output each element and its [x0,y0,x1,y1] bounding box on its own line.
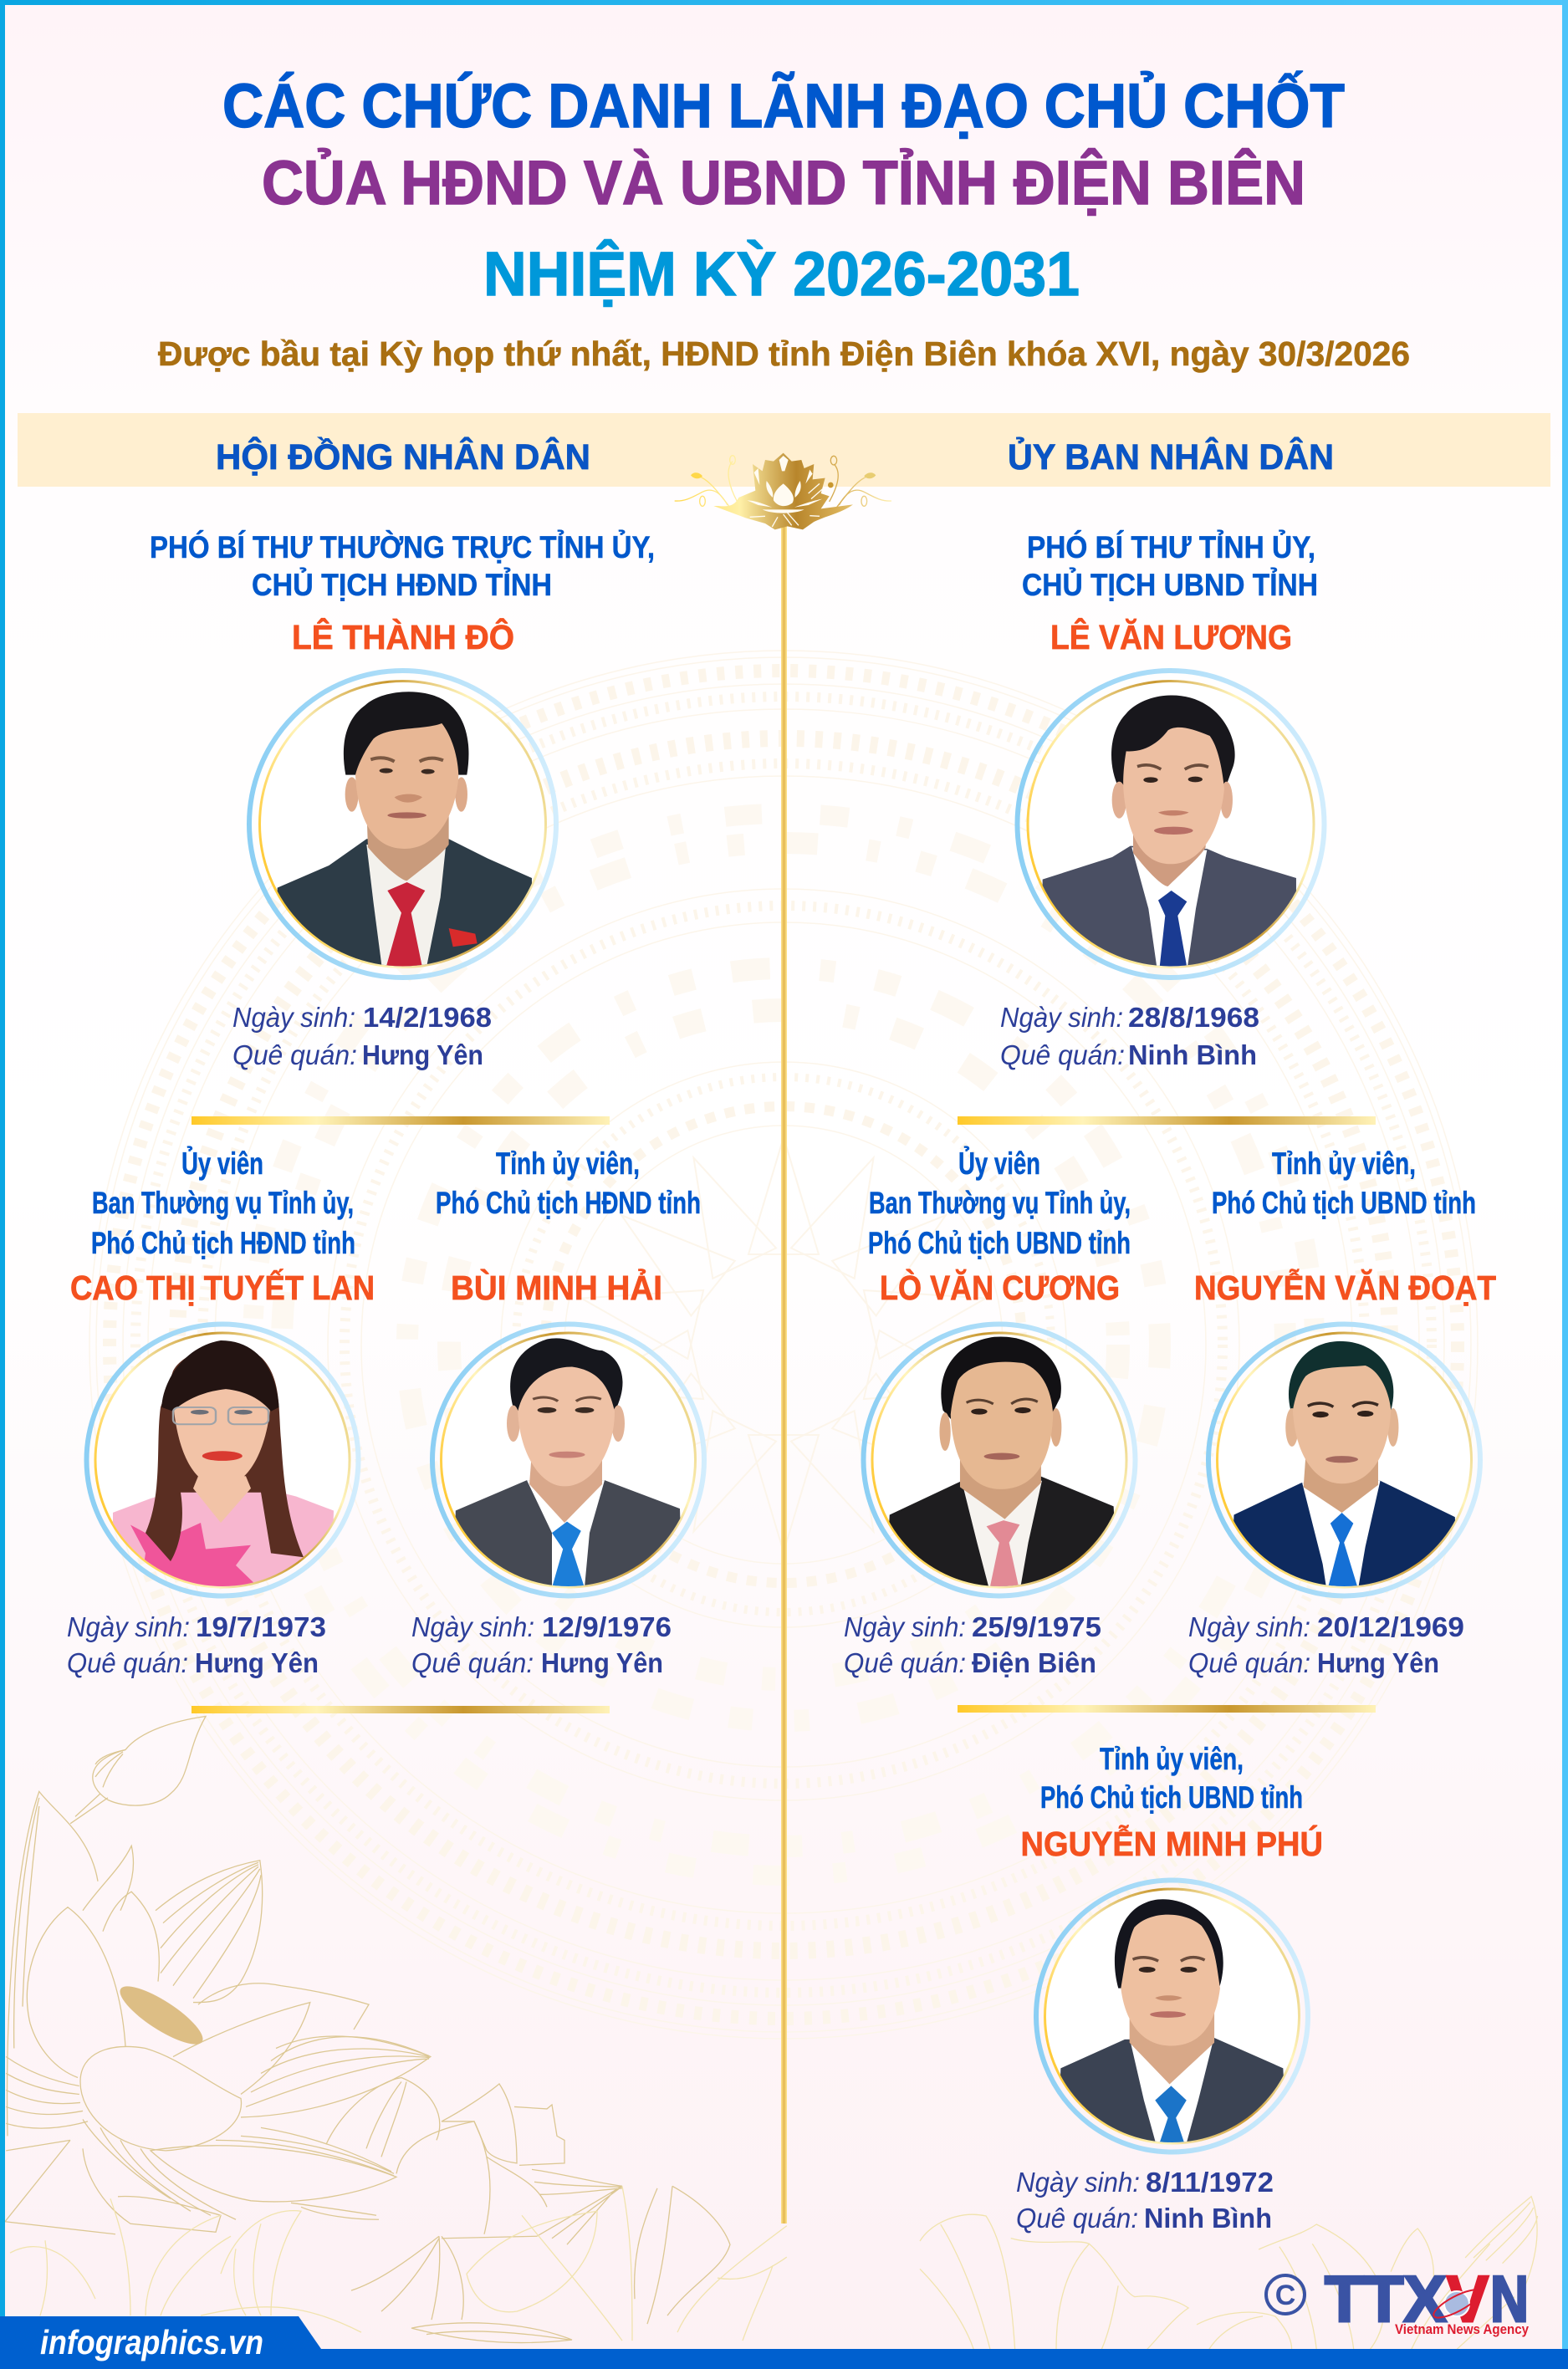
info: Lò Văn Cương: Ngày sinh: [844,1611,966,1642]
info: Cao Thị Tuyết Lan: Ngày sinh: [67,1611,190,1642]
role: Nguyễn Văn Đoạt [1212,1146,1476,1220]
info: Lê Thành Đô: 14/2/1968 [363,1002,492,1033]
name: Bùi Minh Hải: BÙI MINH HẢI [451,1269,662,1307]
portrait: Nguyễn Minh Phú [1036,1880,1308,2152]
name: Lê Văn Lương: LÊ VĂN LƯƠNG [1050,618,1292,656]
info: Bùi Minh Hải: Quê quán: [411,1647,534,1678]
copyright mark [1266,2275,1305,2314]
subtitle: Được bầu tại Kỳ họp thứ nhất, HĐND tỉnh Điện Biên khóa XVI, ngày 30/3/2026 [158,334,1410,373]
portrait: Lê Thành Đô [249,671,556,978]
name: Nguyễn Văn Đoạt: NGUYỄN VĂN ĐOẠT [1194,1269,1496,1307]
info: Lê Văn Lương: Quê quán: [1000,1039,1125,1070]
info: Nguyễn Văn Đoạt: Ngày sinh: [1188,1611,1310,1642]
info: Lê Văn Lương [1000,1002,1259,1070]
info: Lò Văn Cương: 25/9/1975 [972,1611,1101,1642]
info: Nguyễn Văn Đoạt: Hưng Yên [1317,1647,1439,1678]
title line 3: NHIỆM KỲ 2026-2031 [483,239,1080,309]
gold divider: left lower [192,1706,610,1713]
info: Lê Thành Đô [232,1002,492,1070]
role: Lò Văn Cương [868,1146,1131,1260]
column: UBND leader [1000,529,1325,1070]
role: Lê Văn Lương: PHÓ BÍ THƯ TỈNH ỦY, [1027,529,1315,564]
copyright mark: C [1275,2280,1295,2311]
info: Nguyễn Minh Phú: 8/11/1972 [1146,2167,1274,2198]
gold divider: right upper [958,1116,1376,1125]
role: Bùi Minh Hải: Tỉnh ủy viên, [496,1146,640,1181]
role: Lò Văn Cương: Ủy viên [958,1146,1040,1181]
background: line-art lotus, bottom left [5,1716,787,2343]
header band [18,413,1550,487]
name: Nguyễn Minh Phú: NGUYỄN MINH PHÚ [1020,1825,1323,1863]
info: Bùi Minh Hải [411,1611,672,1678]
card: Nguyễn Minh Phú [1016,1742,1323,2234]
role: Nguyễn Minh Phú [1040,1742,1303,1815]
background: bronze drum pattern [89,651,1478,2039]
role: Cao Thị Tuyết Lan: Phó Chủ tịch HĐND tỉnh [91,1226,355,1260]
card: Cao Thị Tuyết Lan [67,1146,375,1678]
portrait: Cao Thị Tuyết Lan [87,1325,358,1596]
portrait: Nguyễn Văn Đoạt [1208,1325,1480,1596]
name: Cao Thị Tuyết Lan: CAO THỊ TUYẾT LAN [70,1269,375,1307]
info: Nguyễn Văn Đoạt [1188,1611,1464,1678]
name: Lò Văn Cương: LÒ VĂN CƯƠNG [880,1269,1120,1307]
background: line-art lotus, bottom right [920,2197,1538,2349]
wordmark: TTX [1325,2262,1447,2336]
info: Lê Thành Đô: Hưng Yên [362,1039,483,1070]
info: Nguyễn Văn Đoạt: 20/12/1969 [1317,1611,1464,1642]
logo: TTXVN [1266,2262,1529,2337]
center vertical divider [781,525,787,2223]
gold divider: right lower [958,1705,1376,1713]
column: HĐND leader [150,529,655,1070]
card: Nguyễn Văn Đoạt [1188,1146,1496,1678]
role: Cao Thị Tuyết Lan: Ủy viên [181,1146,263,1181]
info: Bùi Minh Hải: Hưng Yên [541,1647,663,1678]
title line 2: CỦA HĐND VÀ UBND TỈNH ĐIỆN BIÊN [262,148,1305,217]
wordmark [1325,2262,1529,2336]
role: Lò Văn Cương: Ban Thường vụ Tỉnh ủy, [869,1186,1131,1220]
role: Cao Thị Tuyết Lan [91,1146,355,1260]
info: Nguyễn Minh Phú: Ngày sinh: [1016,2167,1140,2198]
info: Nguyễn Minh Phú: Quê quán: [1016,2203,1138,2234]
portrait: Bùi Minh Hải [432,1325,704,1596]
footer bar [0,2349,1568,2369]
info: Cao Thị Tuyết Lan [67,1611,326,1678]
icon: gold lotus [675,453,891,529]
footer tab: infographics.vn: infographics.vn [40,2323,263,2361]
info: Lò Văn Cương: Quê quán: [844,1647,966,1678]
role: Nguyễn Minh Phú: Phó Chủ tịch UBND tỉnh [1040,1780,1303,1815]
portrait: Lò Văn Cương [863,1325,1136,1596]
info: Nguyễn Văn Đoạt: Quê quán: [1188,1647,1310,1678]
frame: left bar [0,0,5,2369]
info: Lò Văn Cương [844,1611,1101,1678]
card: Bùi Minh Hải [411,1146,704,1678]
heading: Hội đồng nhân dân: HỘI ĐỒNG NHÂN DÂN [216,437,590,477]
info: Lê Thành Đô: Ngày sinh: [232,1002,355,1033]
info: Cao Thị Tuyết Lan: 19/7/1973 [196,1611,326,1642]
role: Bùi Minh Hải: Phó Chủ tịch HĐND tỉnh [436,1186,701,1220]
info: Bùi Minh Hải: Ngày sinh: [411,1611,534,1642]
info: Cao Thị Tuyết Lan: Hưng Yên [195,1647,319,1678]
role: Lê Thành Đô [150,529,655,602]
agency name: Vietnam News Agency [1395,2321,1529,2337]
role: Lê Văn Lương [1022,529,1318,602]
card: Lò Văn Cương [844,1146,1136,1678]
info: Lò Văn Cương: Điện Biên [972,1647,1096,1678]
role: Cao Thị Tuyết Lan: Ban Thường vụ Tỉnh ủy, [92,1186,354,1220]
role: Lò Văn Cương: Phó Chủ tịch UBND tỉnh [868,1226,1131,1260]
role: Lê Thành Đô: CHỦ TỊCH HĐND TỈNH [252,567,552,602]
info: Lê Thành Đô: Quê quán: [232,1039,357,1070]
role: Nguyễn Minh Phú: Tỉnh ủy viên, [1100,1742,1244,1776]
role: Lê Văn Lương: CHỦ TỊCH UBND TỈNH [1022,567,1318,602]
role: Nguyễn Văn Đoạt: Tỉnh ủy viên, [1272,1146,1416,1181]
info: Lê Văn Lương: Ngày sinh: [1000,1002,1123,1033]
role: Nguyễn Văn Đoạt: Phó Chủ tịch UBND tỉnh [1212,1186,1476,1220]
role: Lê Thành Đô: PHÓ BÍ THƯ THƯỜNG TRỰC TỈNH ỦY, [150,529,655,564]
wordmark: V [1447,2262,1489,2336]
seed pod of the lotus [113,1977,210,2054]
frame: right bar [1562,0,1568,2369]
heading: Ủy ban nhân dân: ỦY BAN NHÂN DÂN [1008,437,1334,477]
portrait: Lê Văn Lương [1017,671,1325,978]
info: Cao Thị Tuyết Lan: Quê quán: [67,1647,188,1678]
info: Lê Văn Lương: Ninh Bình [1128,1039,1257,1070]
info: Nguyễn Minh Phú [1016,2167,1274,2234]
title line 1: CÁC CHỨC DANH LÃNH ĐẠO CHỦ CHỐT [222,71,1345,140]
wordmark: N [1490,2262,1529,2336]
footer tab: infographics.vn [0,2316,321,2369]
gold divider: left upper [192,1116,610,1125]
info: Nguyễn Minh Phú: Ninh Bình [1144,2203,1272,2234]
frame: top bar [0,0,1568,5]
name: Lê Thành Đô: LÊ THÀNH ĐÔ [292,618,514,656]
info: Bùi Minh Hải: 12/9/1976 [542,1611,672,1642]
info: Lê Văn Lương: 28/8/1968 [1128,1002,1259,1033]
title block [158,71,1410,373]
role: Bùi Minh Hải [436,1146,701,1220]
